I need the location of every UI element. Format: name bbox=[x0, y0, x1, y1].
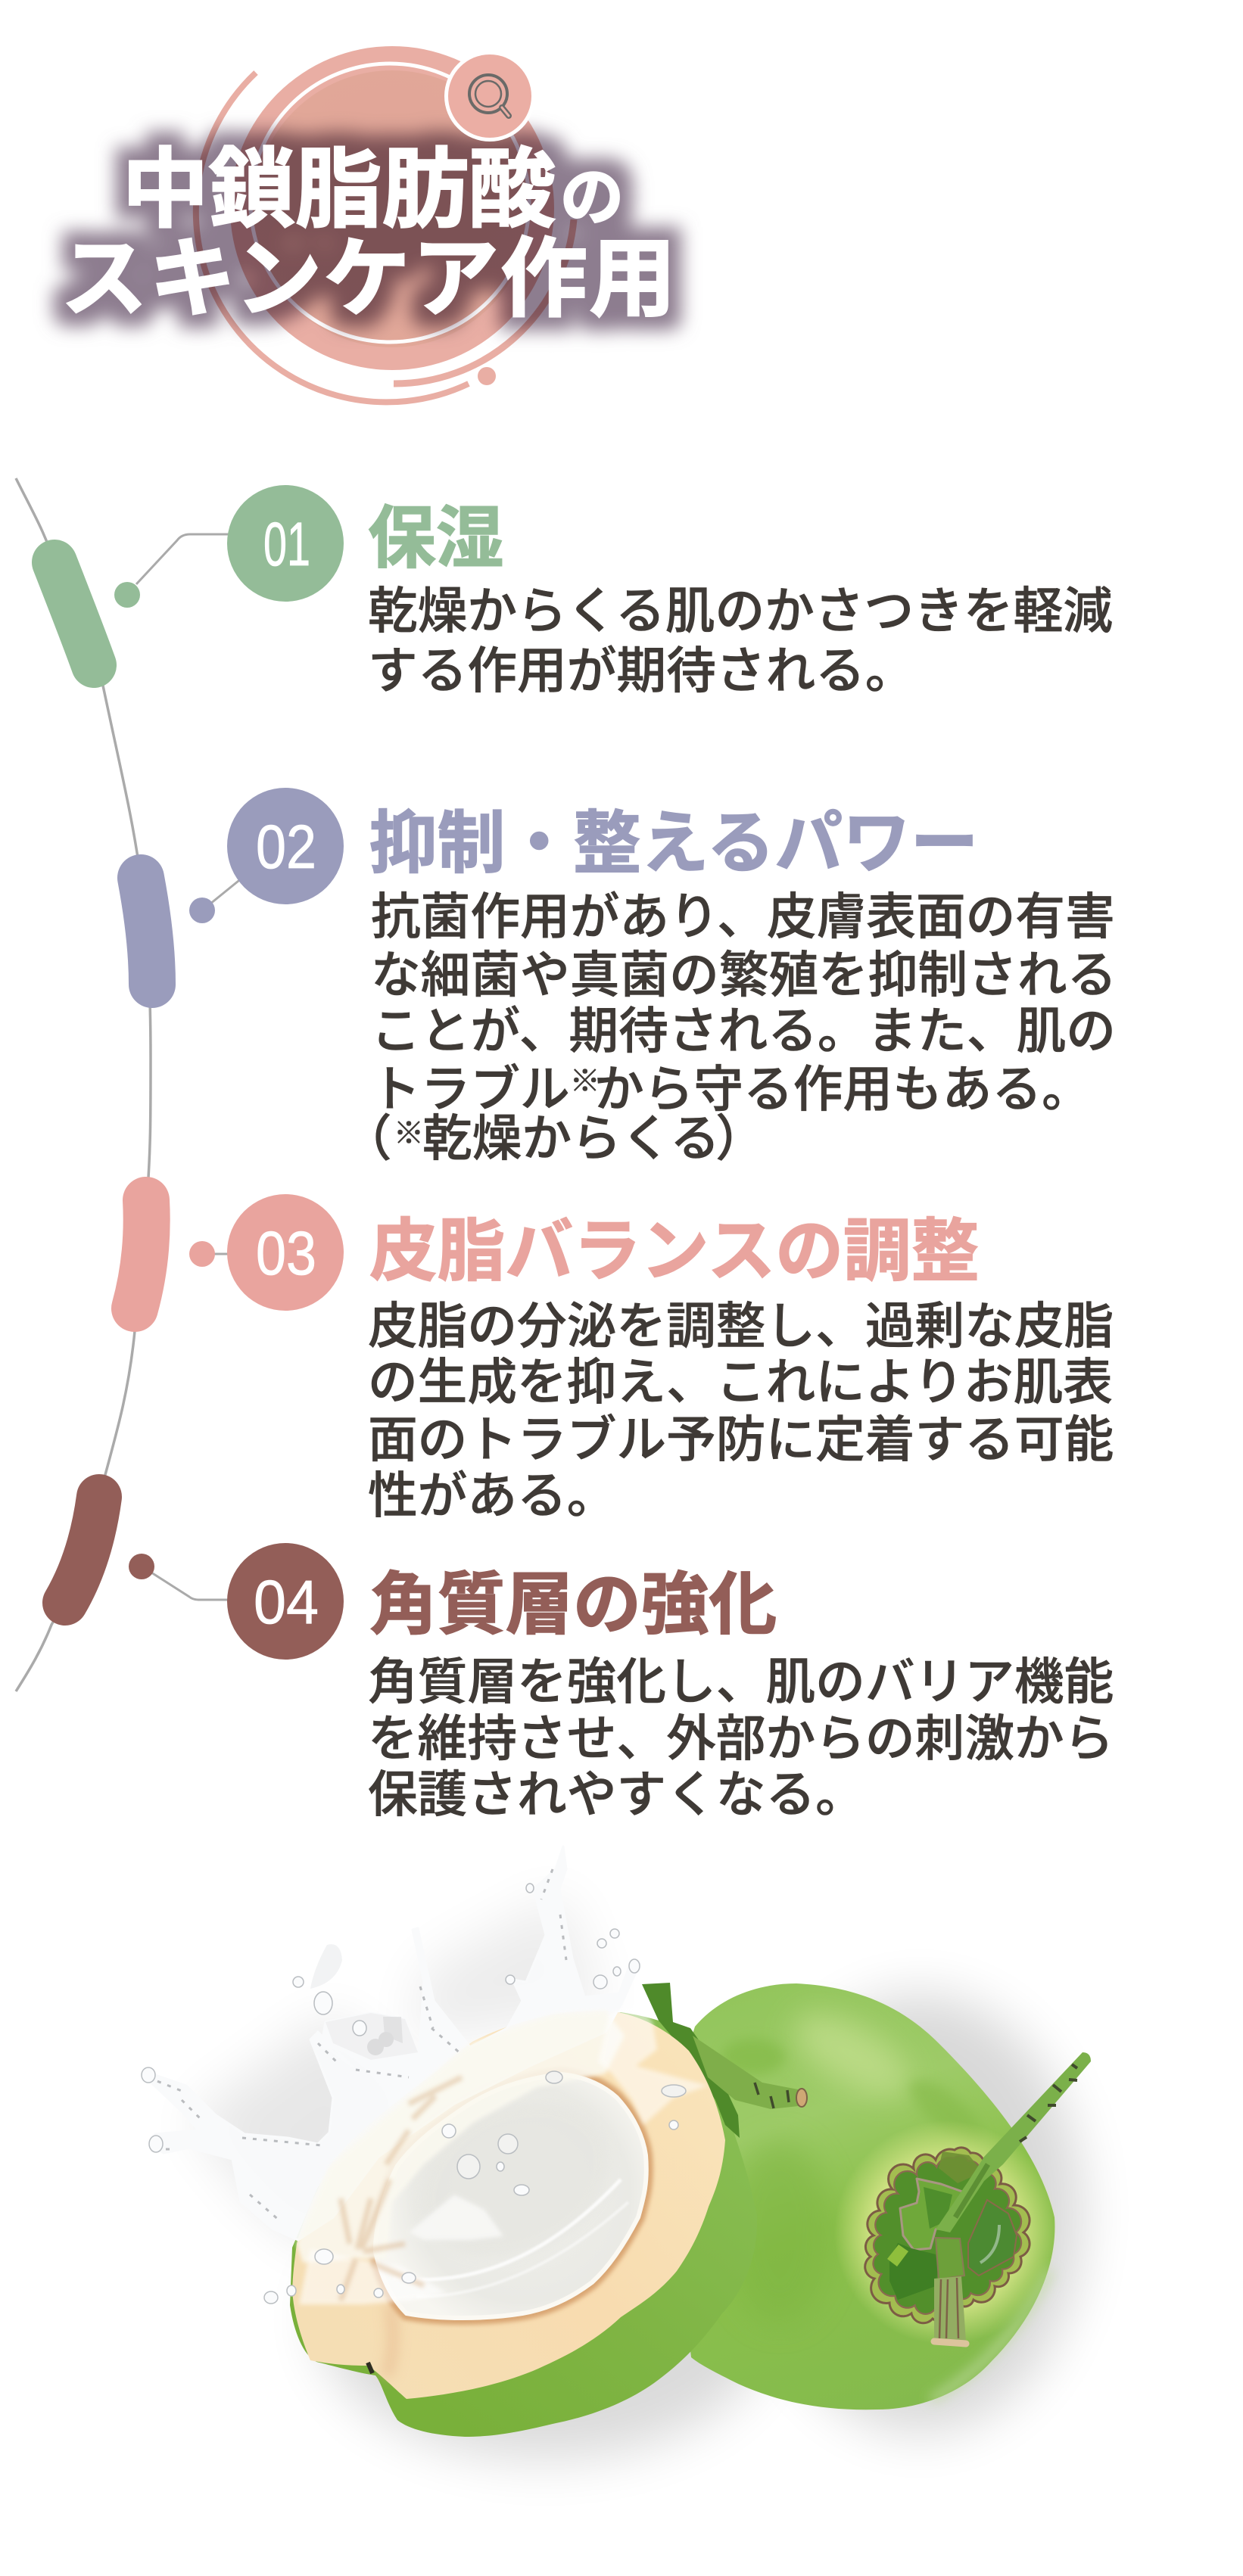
title badge: pink circles bbox=[196, 46, 574, 402]
timeline capsule 01 bbox=[55, 562, 94, 665]
text block 02: ） bbox=[715, 1111, 765, 1166]
timeline capsule 04 bbox=[65, 1497, 99, 1603]
splash outside the fruit bbox=[142, 1846, 640, 2240]
soft shadow haze bbox=[189, 1892, 1083, 2459]
inner disc bbox=[254, 70, 531, 347]
left half coconut shell bbox=[290, 2012, 757, 2437]
outer arc bbox=[196, 73, 469, 402]
inner lower-right arc bbox=[394, 219, 574, 384]
item 02 connector bbox=[189, 878, 242, 923]
text block 02: な細菌や真菌の繁殖を抑制される bbox=[371, 947, 1117, 1003]
item 03 connector bbox=[189, 1241, 230, 1267]
text block 02: ことが、期待される。また、肌の bbox=[371, 1003, 1116, 1059]
text block 03: 皮脂の分泌を調整し、過剰な皮脂 bbox=[368, 1299, 1114, 1354]
right coconut bbox=[666, 1983, 1058, 2410]
badge 03: 03 bbox=[256, 1219, 316, 1288]
text block 02: 乾燥からくる bbox=[422, 1111, 720, 1166]
title glow shadow: の bbox=[560, 162, 624, 233]
badge 01 bbox=[227, 485, 344, 602]
flow streaks bbox=[341, 2077, 462, 2301]
text block 02: ※ bbox=[394, 1117, 424, 1150]
grey specks on splash bbox=[148, 1869, 566, 2221]
coconut stems bbox=[934, 2052, 1091, 2344]
splash over the flesh bbox=[297, 2011, 625, 2263]
coconut calyx bbox=[865, 2148, 1030, 2323]
heading 04: 角質層の強化 bbox=[369, 1567, 777, 1643]
text block 02: 抗菌作用があり、皮膚表面の有害 bbox=[371, 889, 1115, 944]
text block 02: ※ bbox=[570, 1065, 600, 1098]
badge 02 bbox=[227, 788, 344, 904]
text block 03: 性がある。 bbox=[368, 1468, 616, 1523]
heading 01: 保湿 bbox=[368, 501, 503, 577]
water splash bbox=[142, 1846, 708, 2304]
item 04 connector bbox=[129, 1554, 230, 1600]
badge 02: 02 bbox=[256, 813, 316, 882]
text block 04 bbox=[368, 1654, 1114, 1822]
item 01 connector bbox=[114, 534, 230, 608]
left stem bbox=[642, 1983, 807, 2138]
title glow shadow: スキンケア作用 bbox=[61, 231, 676, 328]
text block 01 bbox=[368, 583, 1113, 698]
illustration: coconuts with splash bbox=[142, 1846, 1091, 2459]
badge 03 bbox=[227, 1194, 344, 1311]
text block 01: する作用が期待される。 bbox=[368, 643, 915, 698]
text block 03 bbox=[368, 1299, 1114, 1523]
heading 02: 抑制・整えるパワー bbox=[369, 806, 978, 882]
text block 02: トラブル bbox=[371, 1062, 570, 1117]
badge 04 bbox=[227, 1543, 344, 1660]
badge 01: 01 bbox=[263, 510, 310, 579]
title glow shadow bbox=[61, 142, 676, 328]
timeline capsule 03 bbox=[135, 1200, 147, 1308]
heading 03: 皮脂バランスの調整 bbox=[369, 1214, 979, 1290]
title: の bbox=[560, 162, 624, 233]
text block 04: を維持させ、外部からの刺激から bbox=[368, 1711, 1114, 1766]
title bbox=[61, 142, 676, 328]
badge 04: 04 bbox=[254, 1568, 319, 1637]
text block 04: 角質層を強化し、肌のバリア機能 bbox=[368, 1654, 1114, 1710]
text block 02 bbox=[342, 889, 1117, 1166]
text block 02: から守る作用もある。 bbox=[594, 1062, 1092, 1117]
white ring bbox=[251, 64, 529, 342]
timeline curve bbox=[16, 478, 151, 1691]
timeline capsule 02 bbox=[141, 878, 152, 985]
text block 01: 乾燥からくる肌のかさつきを軽減 bbox=[368, 583, 1113, 639]
text block 03: 面のトラブル予防に定着する可能 bbox=[368, 1412, 1114, 1467]
icon: magnifier badge bbox=[444, 51, 535, 142]
splash droplets bbox=[142, 1884, 686, 2304]
milky drop shapes bbox=[310, 1944, 342, 1989]
big pink disc bbox=[230, 46, 554, 370]
title glow shadow: 中鎖脂肪酸 bbox=[122, 142, 556, 238]
text block 03: の生成を抑え、これによりお肌表 bbox=[368, 1355, 1113, 1410]
title: スキンケア作用 bbox=[61, 231, 676, 328]
coconut flesh bbox=[292, 2011, 725, 2399]
text block 04: 保護されやすくなる。 bbox=[368, 1767, 865, 1822]
title: 中鎖脂肪酸 bbox=[122, 142, 556, 238]
small dot bbox=[478, 367, 496, 385]
text block 02: （ bbox=[342, 1111, 392, 1166]
coconut inner ring and white meat bbox=[375, 2073, 646, 2318]
